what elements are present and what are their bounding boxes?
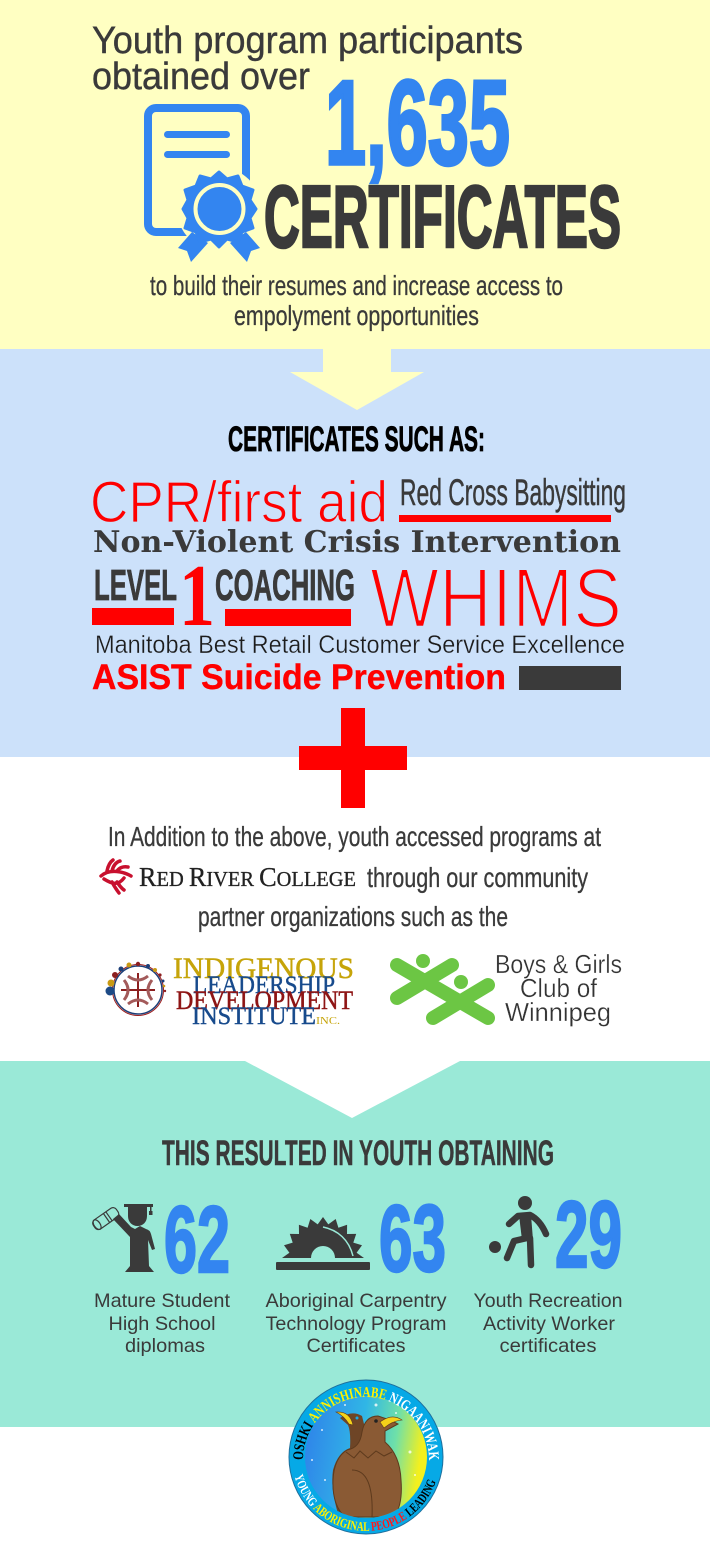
wordmark: boys and girls: Boys & Girls [495,949,622,979]
cert: numeral 1: 1 [179,548,215,645]
label: recreation: Activity Worker [483,1313,616,1335]
heading: certificates such as: CERTIFICATES SUCH AS: [228,420,485,459]
underline: babysitting red bar [399,515,611,522]
icon: saw blade [276,1217,370,1270]
cert: WHIMS: WHIMS [370,551,622,645]
wordmark: leadership: LEADERSHIP [193,972,335,999]
badge sky [305,1396,427,1518]
label: recreation: certificates [500,1335,597,1357]
badge top text: OSHKI ANNISHINABE NIGAANIWAK [293,1387,439,1460]
badge bottom text: YOUNG ABORIGINAL PEOPLE LEADING [294,1474,436,1531]
logo: Boys and Girls Club [397,949,622,1027]
logo: Indigenous Leadership Development Institute [106,952,354,1030]
label: recreation [474,1290,622,1357]
stat: 62 diplomas [91,1187,231,1357]
wordmark: indigenous: INDIGENOUS [173,952,354,985]
stat: 29 recreation [474,1182,622,1357]
number: 62: 62 [164,1187,230,1293]
text: partner organizations: partner organizations such as the [198,901,508,932]
eagles [332,1412,402,1520]
panel: white partners background [0,757,710,1061]
label: carpentry: Certificates [306,1335,406,1357]
label: mature student [94,1290,231,1357]
wordmark: winnipeg: Winnipeg [505,997,611,1027]
icon: soccer player [489,1196,546,1265]
icon: certificate with rosette [148,108,261,262]
panel: yellow headline background [0,0,710,349]
label: recreation: Youth Recreation [474,1290,622,1312]
icon: red river college mark [101,860,131,893]
heading: youth program participants: Youth program participants [92,20,523,62]
cert: Manitoba Best Retail: Manitoba Best Retail Customer Service Excellence [95,631,625,659]
stars [311,1404,416,1481]
icon: green figures [397,954,488,1018]
cert: CPR/first aid: CPR/first aid [90,470,388,535]
wordmark: institute: INSTITUTE [192,1003,316,1030]
cert: Non-Violent Crisis Intervention: Non-Violent Crisis Intervention [93,525,621,560]
cert: ASIST Suicide Prevention: ASIST Suicide Prevention [92,658,506,697]
bar: coaching red bar [225,609,351,626]
icon: graduate [91,1204,155,1272]
label: carpentry: Aboriginal Carpentry [266,1290,447,1312]
number: 63: 63 [379,1186,446,1292]
heading: obtained over: obtained over [92,56,310,98]
logo: Oshki Annishinabe Nigaaniwak [288,1380,444,1534]
cert: COACHING: COACHING [215,561,355,610]
label: mature student: Mature Student [94,1290,231,1312]
badge ring [289,1380,443,1534]
label: mature student: High School [108,1313,216,1335]
arrow: yellow down arrow [290,349,424,410]
cert: LEVEL: LEVEL [94,561,177,610]
number: 29: 29 [555,1182,622,1288]
wordmark: red river college: RED RIVER COLLEGE [139,862,356,892]
bar: dark block [519,666,621,690]
wordmark: inc: INC. [316,1016,340,1027]
wordmark: development: DEVELOPMENT [176,986,353,1015]
logo: Red River College [101,860,356,893]
text: through our community: through our community [367,862,588,893]
icon: medallion [106,962,166,1016]
label: carpentry: Technology Program [266,1313,446,1335]
word cloud of certificates [90,470,626,697]
wordmark: club of: Club of [520,973,598,1003]
label: carpentry [266,1290,447,1357]
number: 1,635: 1,635 [325,56,510,190]
panel: teal results background [0,1061,710,1427]
stat: 63 carpentry [266,1186,447,1357]
icon: red plus [299,708,407,808]
label: mature student: diplomas [125,1335,205,1357]
panel: blue certificates background [0,349,710,757]
text: employment opportunities: empolyment opportunities [234,300,479,331]
text: to build their resumes: to build their resumes and increase access to [150,270,563,301]
bar: level red bar [92,608,174,625]
arrow: white down arrow [245,1061,460,1118]
